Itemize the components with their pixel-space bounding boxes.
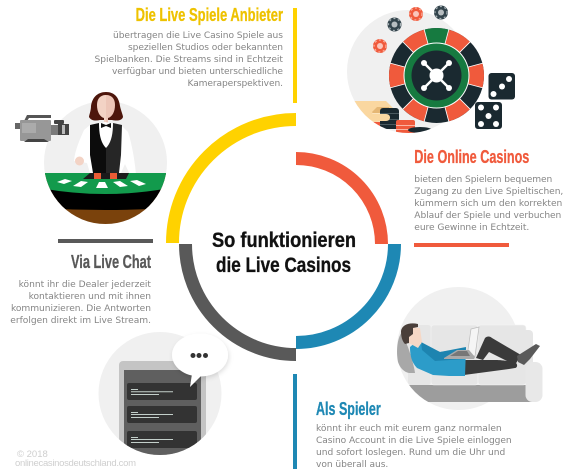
casino chips (373, 6, 448, 53)
panel: player (293, 374, 512, 470)
text block: providers (94, 31, 283, 89)
text block: online casinos: Zugang zu den Live Spieltischen, (414, 187, 563, 197)
text block: player: Casino Account in die Live Spiele einloggen (316, 436, 512, 446)
text block: providers: verfügbar und bieten unterschiedliche (112, 67, 283, 77)
text block: player: und sofort loslegen. Rund um die Uhr und (316, 448, 505, 458)
hand and chip stacks (354, 101, 432, 134)
icon: video camera (15, 115, 69, 142)
heading: Die Online Casinos: Die Online Casinos (414, 147, 529, 167)
panel: live chat (10, 239, 153, 326)
ring: blue arc (296, 244, 394, 342)
blackjack table (45, 173, 166, 224)
tablet with messages (119, 361, 206, 461)
text block: player (316, 424, 512, 470)
text block: live chat: kommunizieren. Die Antworten (11, 304, 151, 314)
accent bar: orange (414, 243, 509, 247)
heading: Via Live Chat: Via Live Chat (71, 252, 151, 272)
icon: dealer at blackjack table with camera (15, 92, 170, 233)
dealer figure (74, 92, 140, 179)
text block: online casinos: eure Gewinne in Echtzeit. (414, 223, 529, 233)
accent bar: yellow (293, 8, 297, 103)
title: die Live Casinos (216, 254, 351, 277)
text block: online casinos: kümmern sich um den korrekten (414, 199, 562, 209)
copyright: © 2018 (17, 449, 48, 460)
copyright (15, 449, 136, 469)
text block: live chat: kontaktieren und mit ihnen (29, 292, 151, 302)
ring: orange arc (296, 158, 382, 244)
text block: providers: Spielbanken. Die Streams sind in Echtzeit (94, 55, 283, 65)
icon: player on sofa with laptop (395, 287, 542, 410)
accent bar: blue (293, 374, 297, 469)
heading: Die Live Spiele Anbieter: Die Live Spiele Anbieter (136, 5, 283, 25)
text block: player: von überall aus. (316, 460, 388, 470)
text block: online casinos (414, 175, 563, 233)
ring: yellow arc (172, 120, 296, 243)
panel: online casinos (414, 147, 563, 247)
accent bar: grey (58, 239, 153, 243)
panel: live game providers (94, 5, 297, 103)
title (212, 229, 356, 277)
text block: providers: übertragen die Live Casino Spiele aus (113, 31, 283, 41)
icon: chat on tablet with speech bubble (98, 332, 228, 461)
text block: providers: Kameraperspektiven. (188, 79, 283, 89)
ring: grey arc (186, 244, 296, 354)
heading: Als Spieler: Als Spieler (316, 399, 381, 419)
typing dots (190, 353, 208, 358)
icon: roulette wheel with chips and dice (347, 6, 515, 134)
text block: live chat (10, 280, 151, 326)
sofa (395, 325, 542, 402)
text block: live chat: könnt ihr die Dealer jederzeit (19, 280, 151, 290)
title: So funktionieren (212, 229, 356, 252)
text block: online casinos: Ablauf der Spiele und verbuchen (414, 211, 561, 221)
speech bubble (172, 334, 228, 387)
dice (475, 73, 515, 129)
text block: online casinos: bieten den Spielern bequemen (414, 175, 552, 185)
copyright: onlinecasinosdeutschland.com (15, 458, 136, 469)
text block: player: könnt ihr euch mit eurem ganz normalen (316, 424, 502, 434)
wheel (388, 27, 485, 124)
player (401, 323, 540, 376)
text block: providers: speziellen Studios oder bekannten (128, 43, 283, 53)
text block: live chat: erfolgen direkt im Live Stream. (10, 316, 151, 326)
